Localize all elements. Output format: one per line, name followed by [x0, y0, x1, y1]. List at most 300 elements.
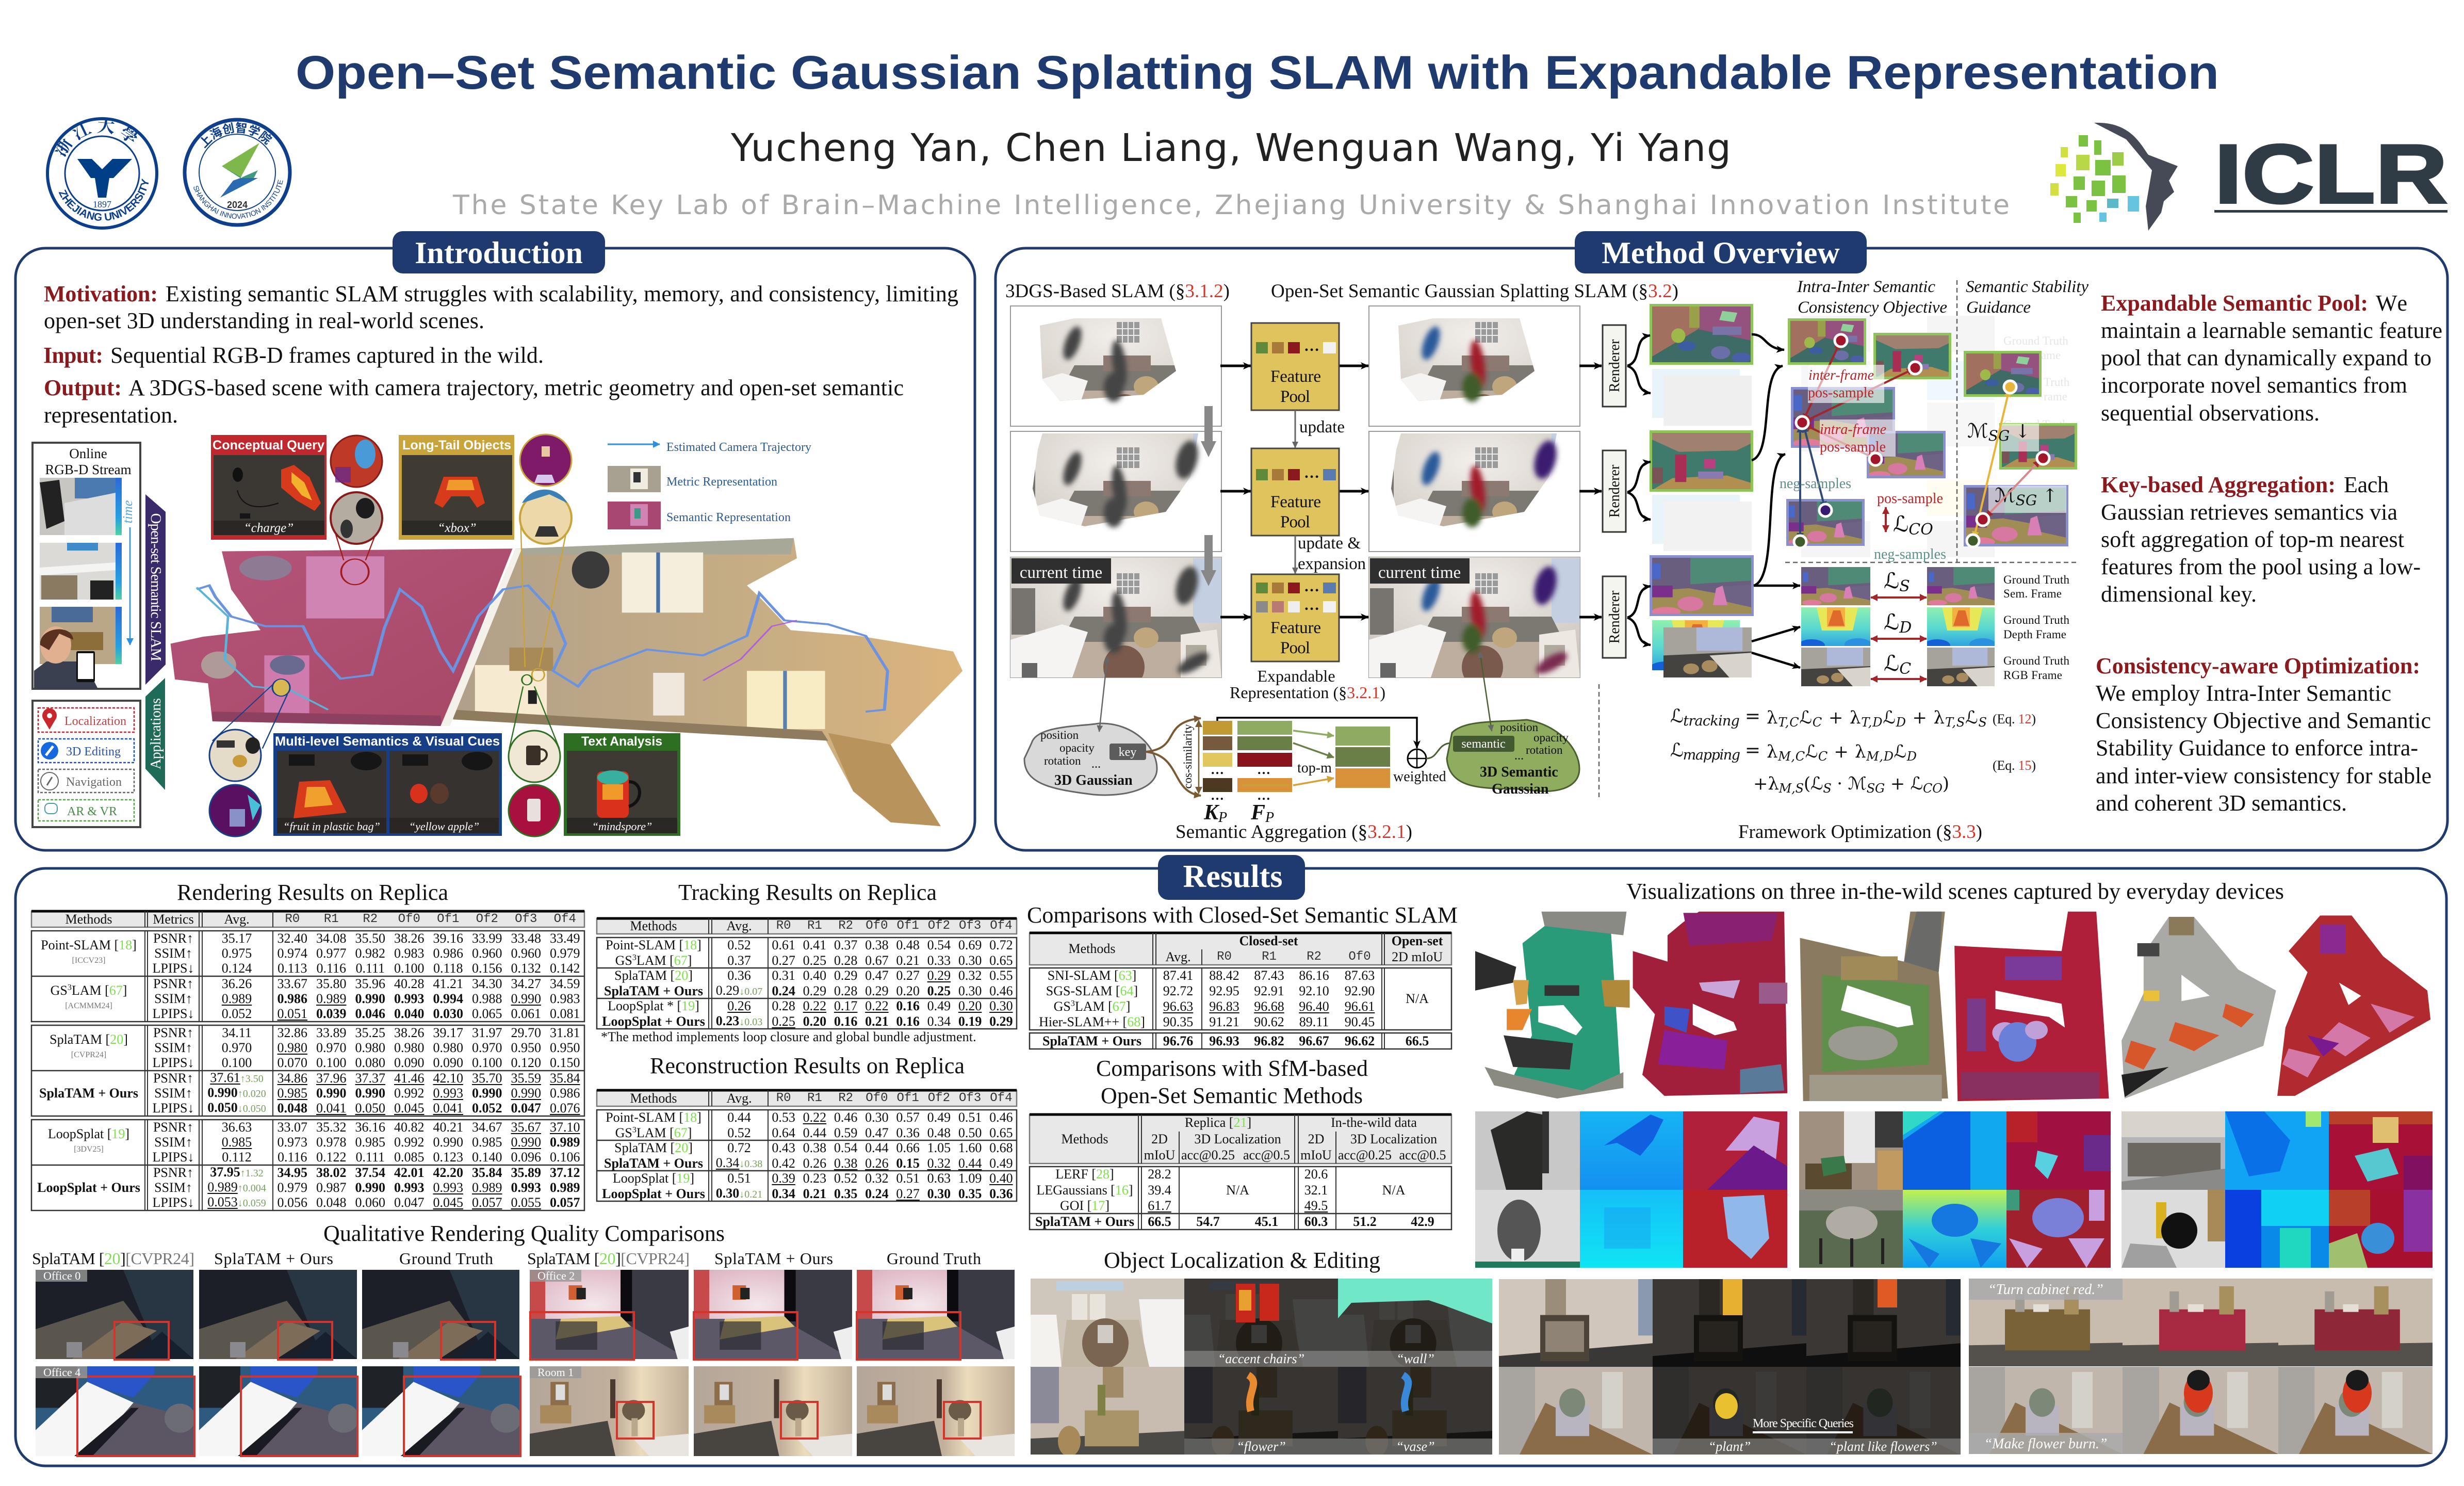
arrow: update and expansion: expansion [1298, 555, 1366, 573]
faint ground truth ghost labels: Ground Truth [2003, 418, 2068, 431]
table: reconstruction results on Replica: 0.39 [772, 1171, 795, 1186]
table: comparisons with closed-set semantic SLAM: 96.40 [1299, 999, 1329, 1014]
table: rendering results on Replica: 41.21 [433, 976, 463, 991]
table: rendering results on Replica: 0.132 [511, 961, 541, 976]
table: comparisons with SfM-based open-set methods: 20.6 [1304, 1167, 1328, 1182]
sample markers [1794, 334, 1921, 548]
equations: tracking and mapping losses: ℒ [1965, 707, 1978, 728]
table: reconstruction results on Replica: 0.36 [896, 1125, 920, 1140]
table: rendering results on Replica: 0.085 [394, 1150, 424, 1165]
equations: tracking and mapping losses: · ℳ [1832, 773, 1867, 794]
equations: tracking and mapping losses: mapping [1683, 747, 1740, 763]
table: rendering results on Replica: SSIM↑ [154, 1086, 192, 1100]
equations: tracking and mapping losses: S [1823, 781, 1832, 796]
text block: motivation, input, output: Sequential RGB-D frames captured in the wild. [110, 343, 544, 368]
table: rendering results on Replica: LPIPS↓ [153, 1150, 194, 1165]
intra-inter consistency frames [1780, 319, 1951, 562]
table: rendering results on Replica: 35.84 [550, 1070, 580, 1086]
equations: tracking and mapping losses: M,S [1778, 781, 1804, 796]
table: rendering results on Replica: 0.992 [394, 1134, 424, 1150]
diagram: 3D Gaussian blob: position [1040, 729, 1079, 741]
table: rendering results on Replica: 0.987 [316, 1180, 347, 1195]
label: inter-frame pos-sample: pos-sample [1808, 385, 1874, 401]
table: comparisons with closed-set semantic SLAM: SGS-SLAM [64] [1046, 983, 1138, 998]
feature pool 3: Feature [1270, 619, 1321, 637]
table: rendering results on Replica: 0.986 [433, 945, 463, 961]
table: rendering results on Replica: 0.061 [511, 1006, 541, 1021]
loss rows: semantic, depth and color: S [1899, 577, 1910, 595]
table: rendering results on Replica: 36.26 [222, 976, 252, 991]
top-m selection: top-m [1297, 760, 1332, 776]
table: rendering results on Replica: Of3 [515, 912, 537, 926]
table: comparisons with closed-set semantic SLAM: 66.5 [1406, 1033, 1429, 1048]
heading: Intra-Inter Semantic Consistency Objective: Consistency Objective [1798, 298, 1947, 317]
equations: tracking and mapping losses: S [1979, 715, 1987, 730]
renderer 3 [1603, 576, 1626, 658]
heading: Comparisons with SfM-based Open-Set Semantic Methods: Comparisons with SfM-based [1096, 1056, 1368, 1081]
table: tracking results on Replica: 0.32 [958, 968, 982, 983]
text block: Consistency-aware Optimization: and coherent 3D semantics. [2096, 790, 2347, 816]
table: rendering results on Replica: PSNR↑ [153, 976, 193, 991]
panel: Results [15, 855, 2446, 1466]
table: tracking results on Replica: 0.52 [727, 938, 751, 952]
application: Navigation: Navigation [66, 776, 122, 789]
table: rendering results on Replica: 42.20 [433, 1165, 463, 1180]
table: rendering results on Replica: 0.048 [316, 1195, 347, 1210]
table: reconstruction results on Replica: 0.30↓0.21 [716, 1186, 762, 1200]
table: rendering results on Replica: 0.055 [511, 1195, 541, 1210]
callout: Multi-level Semantics & Visual Cues: “fruit in plastic bag” [283, 820, 380, 833]
table: rendering results on Replica: R1 [324, 912, 339, 926]
table: tracking results on Replica: 0.55 [989, 968, 1013, 983]
table: tracking results on Replica: 0.19 [958, 1013, 982, 1029]
table: tracking results on Replica: 0.28 [772, 998, 795, 1013]
callout: Multi-level Semantics & Visual Cues [273, 733, 502, 836]
diagram: 3D Gaussian blob: key [1119, 746, 1136, 759]
table: tracking results on Replica: LoopSplat + Ours [602, 1013, 705, 1029]
arrow: update [1295, 410, 1345, 448]
table: rendering results on Replica: 0.980 [355, 1040, 385, 1055]
table: rendering results on Replica: 0.977 [316, 945, 347, 961]
table: rendering results on Replica: 0.111 [355, 1150, 385, 1165]
table: rendering results on Replica: 0.990↑0.020 [207, 1085, 266, 1100]
diagram: 3D Semantic Gaussian blob: rotation [1526, 744, 1563, 756]
table: rendering results on Replica: 35.59 [511, 1070, 541, 1086]
key pool K_P: … [1211, 762, 1224, 777]
diagram: 3D Gaussian blob: 3D Gaussian [1054, 772, 1133, 788]
column labels: qualitative comparison [32, 1249, 981, 1268]
table: comparisons with closed-set semantic SLAM: R0 [1217, 949, 1232, 964]
table: rendering results on Replica: 0.994 [433, 991, 463, 1006]
image row: Office 2: Office 2 [537, 1269, 575, 1282]
heading: Intra-Inter Semantic Consistency Objective [1797, 278, 1947, 317]
table: reconstruction results on Replica: 1.09 [958, 1171, 982, 1186]
diagram: 3D Gaussian blob: rotation [1044, 754, 1081, 767]
table: rendering results on Replica: 0.120 [511, 1055, 541, 1070]
table: rendering results on Replica: 0.065 [472, 1006, 502, 1021]
table: tracking results on Replica: 0.27 [772, 952, 795, 968]
column labels: qualitative comparison: Ground Truth [887, 1249, 981, 1268]
legend: trajectory and representations: Metric Representation [666, 475, 777, 489]
table: reconstruction results on Replica: 0.23 [803, 1171, 826, 1186]
table: comparisons with closed-set semantic SLAM: Hier-SLAM++ [68] [1039, 1014, 1145, 1029]
feature pool 3: … [1304, 596, 1319, 613]
equations: tracking and mapping losses: D [1896, 715, 1906, 730]
table: rendering results on Replica: 0.076 [550, 1101, 580, 1116]
table: rendering results on Replica: LPIPS↓ [153, 1101, 194, 1116]
table: reconstruction results on Replica: 0.27 [896, 1186, 920, 1201]
table: rendering results on Replica: 0.116 [316, 961, 346, 976]
feature pool 3: Pool [1280, 639, 1310, 657]
table: rendering results on Replica: [ICCV23] [72, 956, 105, 965]
image grid: scene 2 views [1799, 1111, 2111, 1268]
label: M_SG down: SG [1988, 427, 2010, 444]
diagram: 3D Semantic Gaussian blob: position [1500, 721, 1539, 734]
table: rendering results on Replica: 0.985 [472, 1134, 502, 1150]
table: rendering results on Replica: 0.990 [511, 991, 541, 1006]
label: pos-sample: pos-sample [1877, 491, 1943, 507]
table: rendering results on Replica: 0.993 [511, 1180, 541, 1195]
feature pool 2: … [1304, 464, 1319, 481]
table: rendering results on Replica: 0.989 [472, 1180, 502, 1195]
table: comparisons with closed-set semantic SLAM: 92.90 [1345, 983, 1375, 998]
text block: Expandable Semantic Pool: sequential observations. [2101, 400, 2320, 426]
table: rendering results on Replica: 0.056 [278, 1195, 307, 1210]
heading: Open-Set Semantic Gaussian Splatting SLAM: Open-Set Semantic Gaussian Splatting SLAM (§3.2) [1271, 281, 1678, 302]
table: reconstruction results on Replica: Point-SLAM [18] [606, 1110, 701, 1125]
frames: Open-set semantic splatting [1369, 306, 1580, 689]
panel: Introduction [15, 231, 975, 850]
table: comparisons with closed-set semantic SLAM: 92.91 [1254, 983, 1284, 998]
table: tracking results on Replica: 0.30 [989, 998, 1013, 1013]
table: rendering results on Replica: Of4 [554, 912, 576, 926]
equations: tracking and mapping losses [1670, 706, 2036, 796]
table: comparisons with closed-set semantic SLAM: 96.67 [1299, 1033, 1329, 1048]
table: comparisons with SfM-based open-set methods: 3D Localization [1350, 1131, 1437, 1146]
heading: Qualitative Rendering Quality Comparisons: Qualitative Rendering Quality Comparisons [323, 1221, 725, 1246]
table: rendering results on Replica: 31.97 [472, 1025, 502, 1040]
table: comparisons with closed-set semantic SLAM: 96.62 [1345, 1033, 1375, 1048]
logo: Shanghai Innovation Institute [183, 118, 292, 227]
loss rows: semantic, depth and color [1798, 567, 2069, 686]
table: comparisons with SfM-based open-set methods: GOI [17] [1060, 1198, 1109, 1213]
equations: tracking and mapping losses: M,D [1866, 749, 1894, 764]
heading: 3DGS-Based SLAM: 3DGS-Based SLAM (§3.1.2) [1005, 281, 1230, 302]
equations: tracking and mapping losses: ℒ [1800, 707, 1812, 728]
circle thumbnails: Multi-level [209, 730, 261, 836]
table: tracking results on Replica: 0.47 [865, 968, 889, 983]
label: M_SG up: SG [2016, 492, 2037, 509]
table: tracking results on Replica: 0.67 [865, 952, 889, 968]
application: 3D Editing: 3D Editing [66, 745, 121, 758]
label: M_SG down [1967, 419, 2039, 451]
image row: Room 1: Room 1 [537, 1366, 574, 1379]
table: reconstruction results on Replica: 0.44 [958, 1156, 982, 1170]
table: tracking results on Replica: 0.40 [803, 968, 826, 983]
table: tracking results on Replica: 0.16 [896, 1013, 920, 1029]
table: tracking results on Replica: 0.29 [803, 983, 826, 998]
table: tracking results on Replica: Point-SLAM [18] [606, 938, 701, 952]
table: rendering results on Replica: 0.122 [316, 1150, 347, 1165]
table: rendering results on Replica: 0.989 [222, 991, 252, 1006]
table: reconstruction results on Replica: 0.46 [834, 1110, 857, 1125]
table: rendering results on Replica: 0.970 [472, 1040, 502, 1055]
table: reconstruction results on Replica: Of3 [959, 1091, 981, 1105]
text block: Expandable Semantic Pool [2101, 290, 2442, 426]
table: tracking results on Replica: 0.34 [927, 1013, 951, 1029]
table: rendering results on Replica: 34.27 [511, 976, 541, 991]
table: comparisons with SfM-based open-set methods: Replica [21] [1185, 1115, 1251, 1130]
text block: motivation, input, output: Output: [44, 375, 122, 400]
callout: Text Analysis [564, 733, 680, 836]
equations: tracking and mapping losses: C [1818, 749, 1827, 764]
table: rendering results on Replica: 35.80 [316, 976, 347, 991]
table: rendering results on Replica: 0.990 [355, 1180, 385, 1195]
table: rendering results on Replica: 0.990 [511, 1134, 541, 1150]
table: comparisons with closed-set semantic SLAM: 96.82 [1254, 1033, 1284, 1048]
table: rendering results on Replica: 35.32 [316, 1120, 347, 1134]
image grid: scene 3 views [2122, 1111, 2433, 1268]
table: tracking results on Replica: 0.21 [865, 1013, 889, 1029]
table: rendering results on Replica: Avg. [224, 911, 250, 927]
table: comparisons with closed-set semantic SLAM: Methods [1069, 941, 1115, 956]
faint ground truth ghost labels: Sem. Frame [2003, 349, 2061, 362]
table: rendering results on Replica: Of1 [437, 912, 459, 926]
table: comparisons with closed-set semantic SLAM: 2D mIoU [1392, 949, 1443, 964]
table: rendering results on Replica: 0.990 [433, 1134, 463, 1150]
table: rendering results on Replica: PSNR↑ [153, 1025, 193, 1040]
table: reconstruction results on Replica: 0.35 [834, 1186, 857, 1201]
table: rendering results on Replica: 0.140 [472, 1150, 502, 1165]
table: rendering results on Replica: R2 [363, 912, 378, 926]
table frame: tracking results [597, 918, 1017, 1029]
table: reconstruction results on Replica: 1.05 [927, 1140, 951, 1155]
table: comparisons with SfM-based open-set methods: 45.1 [1255, 1214, 1278, 1229]
table: comparisons with SfM-based open-set methods: 60.3 [1304, 1214, 1328, 1229]
table: reconstruction results on Replica: 0.21 [803, 1186, 826, 1201]
table: rendering results on Replica: 0.057 [550, 1195, 580, 1210]
table: tracking results on Replica: 0.37 [727, 952, 751, 968]
column labels: qualitative comparison: SplaTAM + Ours [714, 1249, 833, 1268]
table: comparisons with closed-set semantic SLAM: 90.62 [1254, 1014, 1284, 1029]
callout: Multi-level Semantics & Visual Cues: “yellow apple” [409, 820, 479, 833]
table: tracking results on Replica: 0.61 [772, 938, 795, 952]
feature pool F_P: P [1265, 810, 1274, 826]
table: comparisons with closed-set semantic SLAM: Of0 [1348, 949, 1371, 964]
table: reconstruction results on Replica: Of1 [897, 1091, 919, 1105]
table: tracking results on Replica: 0.29 [989, 1013, 1013, 1029]
table: comparisons with SfM-based open-set methods: 32.1 [1304, 1183, 1328, 1197]
table: comparisons with SfM-based open-set methods: mIoU [1144, 1148, 1175, 1162]
table: rendering results on Replica: 39.16 [433, 931, 463, 945]
equations: tracking and mapping losses: T,D [1861, 715, 1882, 730]
table: reconstruction results on Replica: Of4 [990, 1091, 1012, 1105]
equations: tracking and mapping losses: ℒ [1670, 740, 1684, 761]
table: comparisons with closed-set semantic SLAM: Avg. [1165, 949, 1191, 964]
frame 3: current time: current time [1020, 563, 1102, 582]
table: rendering results on Replica: 33.99 [472, 931, 502, 945]
table: tracking results on Replica: 0.72 [989, 938, 1013, 952]
table: tracking results on Replica: 0.25 [927, 983, 951, 998]
column labels: qualitative comparison: SplaTAM + Ours [214, 1249, 333, 1268]
table: comparisons with SfM-based open-set methods: 54.7 [1196, 1214, 1220, 1229]
table: rendering results on Replica: PSNR↑ [153, 1165, 193, 1180]
table: rendering results on Replica: 0.106 [550, 1150, 580, 1165]
table: comparisons with SfM-based open-set methods: SplaTAM + Ours [1035, 1214, 1134, 1229]
table: rendering results on Replica: 0.980 [278, 1040, 307, 1055]
table: comparisons with SfM-based open-set methods: LEGaussians [16] [1036, 1183, 1133, 1197]
table: rendering results on Replica: 0.053↓0.059 [207, 1194, 266, 1209]
renderer 3: Renderer [1607, 590, 1623, 643]
table: comparisons with closed-set semantic SLAM: 96.76 [1163, 1033, 1193, 1048]
table: rendering results on Replica: PSNR↑ [153, 931, 193, 945]
label: Expandable Representation: Expandable [1257, 667, 1335, 685]
circle thumbnails: Conceptual Query [331, 435, 382, 544]
application: Localization: Localization [64, 715, 126, 728]
text block: Key-based Aggregation [2101, 472, 2421, 607]
table: comparisons with closed-set semantic SLAM: SNI-SLAM [63] [1048, 968, 1136, 983]
table: rendering results on Replica: 0.090 [394, 1055, 424, 1070]
legend: trajectory and representations: Semantic Representation [666, 511, 791, 524]
callout: Conceptual Query [211, 435, 327, 540]
legend: trajectory and representations [608, 441, 811, 529]
equations: tracking and mapping losses: (Eq. 12) [1993, 712, 2036, 726]
logo: Zhejiang University: 浙 江 大 學 [52, 117, 137, 157]
equations: tracking and mapping losses: + λ [1906, 707, 1945, 728]
table: rendering results on Replica: 0.052 [222, 1006, 252, 1021]
equations: tracking and mapping losses: ℒ [1805, 741, 1818, 762]
text block: motivation, input, output: Existing semantic SLAM struggles with scalability, memory, and consistency, limiting [166, 281, 958, 306]
table: tracking results on Replica: Of0 [866, 919, 888, 933]
table: rendering results on Replica: 0.111 [355, 961, 385, 976]
text block: motivation, input, output: A 3DGS-based scene with camera trajectory, metric geometry and open-set semantic [128, 375, 904, 400]
heading: Semantic Aggregation: Semantic Aggregation (§3.2.1) [1176, 821, 1412, 843]
arrows: cosine similarity: cos-similarity [1181, 724, 1194, 788]
loss rows: semantic, depth and color: D [1899, 619, 1912, 637]
table: comparisons with closed-set semantic SLAM: 87.41 [1163, 968, 1193, 983]
diagram: 3D Semantic Gaussian blob [1426, 720, 1579, 797]
table: rendering results on Replica: Methods [65, 911, 112, 927]
feature pool 2: Pool [1280, 513, 1310, 531]
callout: Conceptual Query: “charge” [244, 521, 293, 535]
feature pool 1: Pool [1280, 387, 1310, 406]
localization group 1: “vase” [1396, 1439, 1435, 1454]
arrow: frame to 3D Semantic Gaussian [1480, 652, 1492, 731]
table: comparisons with closed-set semantic SLAM: SplaTAM + Ours [1042, 1033, 1141, 1048]
table: rendering results on Replica: SSIM↑ [154, 1134, 192, 1150]
table: rendering results on Replica: 0.993 [433, 1180, 463, 1195]
equations: tracking and mapping losses: (ℒ [1804, 773, 1823, 794]
frames: 3DGS-based SLAM [1010, 306, 1221, 689]
logo: Zhejiang University: ZHEJIANG UNIVERSITY [59, 179, 149, 221]
table: comparisons with closed-set semantic SLAM: 92.95 [1209, 983, 1239, 998]
callout: Long-Tail Objects [399, 435, 514, 540]
table: rendering results on Replica: 0.950 [550, 1040, 580, 1055]
table: rendering results on Replica: SSIM↑ [154, 1040, 192, 1055]
heading: Results: Results [1183, 859, 1282, 894]
table: rendering results on Replica: 0.985 [355, 1134, 385, 1150]
table: tracking results on Replica: 0.25 [803, 952, 826, 968]
table: reconstruction results on Replica: 0.22 [803, 1110, 826, 1125]
key pool K_P: K [1204, 801, 1218, 825]
table: rendering results on Replica: 0.050 [355, 1101, 385, 1116]
table: rendering results on Replica: 36.63 [222, 1120, 252, 1134]
table frame: reconstruction results [597, 1090, 1017, 1201]
scene 2 point cloud [1800, 912, 2109, 1101]
table: rendering results on Replica: 42.01 [394, 1165, 424, 1180]
table: rendering results on Replica: 31.81 [550, 1025, 580, 1040]
localization group 2 [1499, 1279, 1961, 1455]
feature pool F_P: … [1257, 788, 1270, 803]
feature pool 1 [1251, 323, 1339, 410]
renderer 2 [1603, 450, 1626, 532]
equations: tracking and mapping losses: ) [1943, 773, 1949, 794]
table: reconstruction results on Replica: 0.51 [958, 1110, 982, 1125]
table: tracking results on Replica: 0.36 [727, 968, 751, 983]
heading: Semantic Stability Guidance [1966, 278, 2088, 317]
table: rendering results on Replica: 0.980 [394, 1040, 424, 1055]
text block: Expandable Semantic Pool: We [2376, 290, 2407, 316]
label: M_SG up [1988, 484, 2066, 513]
table: comparisons with SfM-based open-set methods: acc@0.5 [1399, 1148, 1446, 1162]
table: reconstruction results on Replica: 0.35 [958, 1186, 982, 1201]
table: reconstruction results on Replica: R0 [776, 1091, 791, 1105]
equations: tracking and mapping losses: T,C [1778, 715, 1799, 730]
arrow: L_CO [1885, 507, 1887, 532]
table: rendering results on Replica: 42.10 [433, 1070, 463, 1086]
table: rendering results on Replica: 0.986 [550, 1086, 580, 1100]
table: rendering results on Replica: 0.960 [511, 945, 541, 961]
table: rendering results on Replica: LPIPS↓ [153, 1055, 194, 1070]
equations: tracking and mapping losses: λ [1767, 741, 1778, 762]
table: tracking results on Replica: 0.49 [927, 998, 951, 1013]
text block: Expandable Semantic Pool: pool that can dynamically expand to [2101, 345, 2432, 370]
semantic stability frames [1964, 351, 2077, 547]
table: rendering results on Replica: 0.124 [222, 961, 252, 976]
table: tracking results on Replica: 0.16 [896, 998, 920, 1013]
image row: Room 1 [530, 1366, 1015, 1456]
table: rendering results on Replica: 0.975 [222, 945, 252, 961]
application: AR & VR: AR & VR [67, 805, 117, 818]
table: rendering results on Replica: 0.039 [316, 1006, 347, 1021]
label: intra-frame pos-sample: intra-frame [1820, 422, 1886, 438]
text block: Expandable Semantic Pool: incorporate novel semantics from [2101, 373, 2407, 398]
table: rendering results on Replica: 34.86 [278, 1070, 307, 1086]
table: rendering results on Replica: 0.993 [394, 1180, 424, 1195]
diagram: 3D Gaussian blob [1024, 723, 1157, 795]
heading: Rendering Results on Replica: Rendering Results on Replica [177, 880, 448, 905]
table: rendering results on Replica: 0.070 [278, 1055, 307, 1070]
equations: tracking and mapping losses: = [1739, 706, 1760, 727]
table: rendering results on Replica: 35.17 [222, 931, 252, 945]
table: comparisons with SfM-based open-set methods: N/A [1382, 1183, 1405, 1197]
point clouds: three in-the-wild scenes [1475, 912, 2430, 1101]
loss rows: semantic, depth and color: ℒ [1884, 609, 1899, 635]
table: rendering results on Replica: 0.989 [550, 1180, 580, 1195]
table: rendering results on Replica: 34.30 [472, 976, 502, 991]
table: rendering results on Replica: 33.89 [316, 1025, 347, 1040]
table: rendering results on Replica: SSIM↑ [154, 991, 192, 1006]
text block: motivation, input, output: Motivation: [44, 281, 158, 306]
callout: Text Analysis: “mindspore” [592, 820, 652, 833]
table: comparisons with SfM-based open-set methods: 39.4 [1148, 1183, 1171, 1197]
table: tracking results on Replica: GS3LAM [67] [615, 952, 692, 968]
text block: Key-based Aggregation: soft aggregation of top-m nearest [2101, 527, 2404, 552]
table: rendering results on Replica: 0.096 [511, 1150, 541, 1165]
figure: online RGB-D stream: RGB-D Stream [45, 462, 132, 477]
table: reconstruction results on Replica: 0.54 [834, 1140, 857, 1155]
column labels: qualitative comparison: SplaTAM [20][CVPR24] [32, 1249, 194, 1268]
